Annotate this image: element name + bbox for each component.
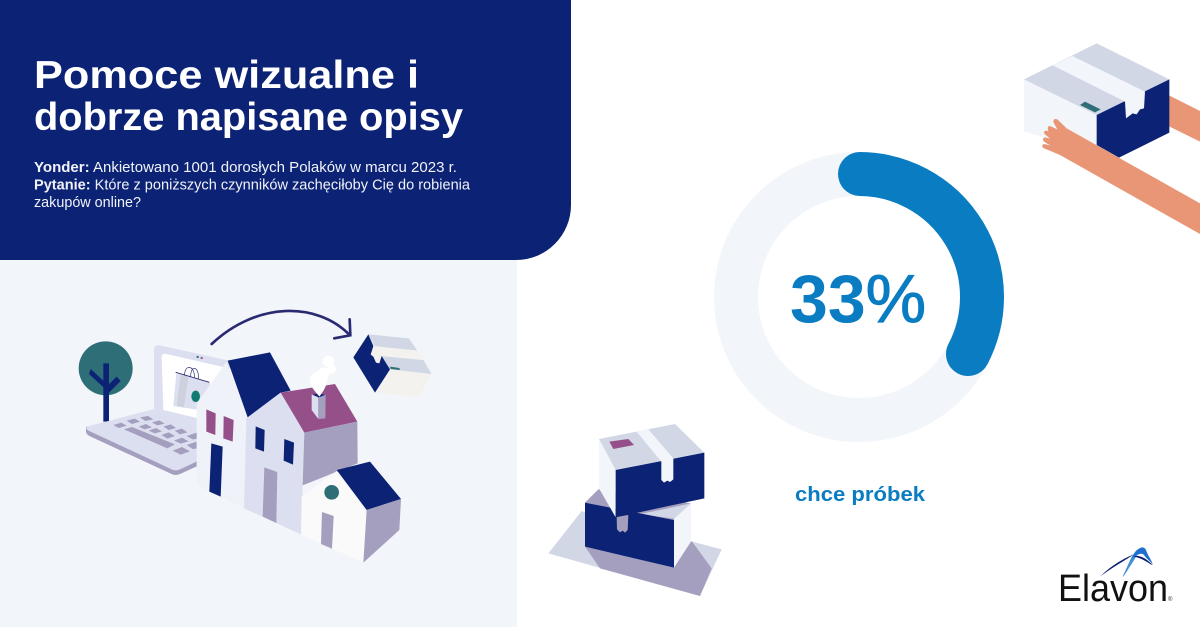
donut chart: 33% <box>736 174 982 420</box>
house: small front <box>301 462 401 563</box>
parcel <box>1024 43 1169 158</box>
survey description text: Pytanie: Które z poniższych czynników zachęciłoby Cię do robienia <box>34 178 471 194</box>
shadow <box>548 511 722 596</box>
label: chce próbek: chce próbek <box>795 483 926 506</box>
arrow: curved <box>212 311 350 344</box>
panel: navy header <box>0 0 571 260</box>
house: middle with chimney <box>244 356 358 534</box>
icon: floating parcel <box>353 334 432 397</box>
statistic: 33%: 33% <box>790 261 926 337</box>
title: Pomoce wizualne i <box>34 54 419 97</box>
logo: Elavon: ® <box>1168 596 1173 603</box>
icon: shopping bag on screen <box>173 367 210 412</box>
title <box>34 54 464 139</box>
survey description text: Yonder: Ankietowano 1001 dorosłych Polaków w marcu 2023 r. <box>34 160 457 176</box>
icon: laptop <box>86 345 233 475</box>
logo: Elavon <box>1058 547 1173 610</box>
back arm <box>1168 95 1200 142</box>
title: dobrze napisane opisy <box>34 96 464 139</box>
front arm and hand <box>1042 119 1200 234</box>
survey description text: zakupów online? <box>34 195 141 211</box>
upper parcel <box>599 424 704 517</box>
survey description text <box>34 160 471 211</box>
lower parcel <box>585 489 691 568</box>
icon: stacked parcels <box>548 424 722 596</box>
icon: tree <box>79 341 133 422</box>
logo mark <box>1100 547 1153 577</box>
icon: chimney and smoke <box>310 356 336 419</box>
house: left tall <box>197 352 291 508</box>
illustration: laptop, houses and parcel <box>79 311 401 563</box>
panel: light illustration background <box>0 260 517 627</box>
logo: Elavon: Elavon <box>1058 568 1168 610</box>
icon: hands holding parcel <box>1024 43 1200 234</box>
